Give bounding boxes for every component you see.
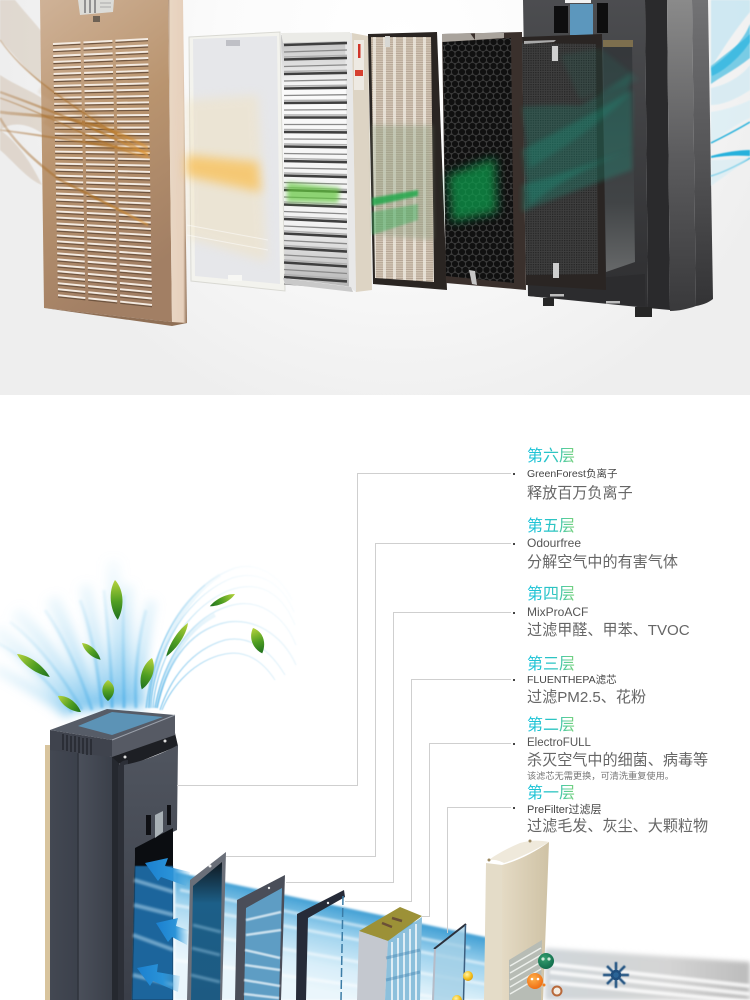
purifier assembled unit [45, 709, 178, 1000]
layer 2 note: 该滤芯无需更换，可清洗重复使用。 [527, 770, 674, 781]
connector: layer 6 [177, 474, 511, 786]
main unit body, open back view [523, 0, 713, 317]
connector: layer 2 [422, 744, 511, 916]
layer 2 description: 杀灭空气中的细菌、病毒等 [527, 751, 708, 769]
layer 5 heading: 第五层 [527, 517, 575, 535]
connector: layer 4 [286, 612, 511, 882]
layer 2 heading: 第二层 [527, 716, 575, 734]
exploded HEPA box [357, 907, 422, 1000]
icon: control window on unit [554, 0, 608, 35]
layer 5 label [527, 517, 678, 571]
front gold cover lower [484, 840, 549, 1000]
icon: red direction arrows [354, 40, 364, 90]
layer 4 name: MixProACF [527, 605, 588, 619]
icon: orange germ [527, 973, 546, 989]
lower-section gray air stream [545, 948, 750, 1000]
filter 4: activated carbon honeycomb [442, 32, 526, 290]
decorative waves: cyan airflow at right [711, 0, 750, 186]
layer 1 description: 过滤毛发、灰尘、大颗粒物 [527, 818, 708, 835]
exploded thin filter frame [432, 924, 466, 1000]
filter 5: odour mesh [522, 34, 606, 290]
exploded filter 1 frame [187, 852, 226, 1000]
exploded filter 3 frame [296, 890, 345, 1000]
layer 3 description: 过滤PM2.5、花粉 [527, 689, 646, 706]
layer 3 label [527, 655, 646, 706]
lower-section airflow fan [0, 560, 296, 714]
yellow dust particles [452, 971, 473, 1000]
layer 1 name: PreFilter过滤层 [527, 803, 602, 816]
icon: blue virus [603, 962, 629, 988]
filter 2: silver electrostatic grille [281, 32, 372, 292]
icon: ring particle [552, 986, 562, 996]
decorative waves: brown airflow ribbons at left [0, 0, 45, 185]
decorative waves: brown airflow strands [0, 40, 150, 225]
icon: product label [78, 0, 114, 15]
teal airflow across filter 5 [522, 48, 640, 212]
layer 6 heading: 第六层 [527, 447, 575, 465]
layer 1 label [527, 784, 708, 835]
icon: green germ [538, 953, 554, 969]
layer 3 heading: 第三层 [527, 655, 575, 673]
layer 2 name: ElectroFULL [527, 737, 592, 749]
filter 3: HEPA [368, 32, 447, 290]
connector: layer 3 [345, 680, 511, 902]
layer 6 label [527, 447, 633, 502]
connector lines [177, 474, 511, 933]
front gold panel with grille [40, 0, 187, 326]
leaves [15, 580, 268, 715]
filter 1: white pre-filter [186, 32, 285, 291]
hero background panel [0, 0, 750, 395]
layer 3 name: FLUENTHEPA滤芯 [527, 673, 617, 686]
layer 4 heading: 第四层 [527, 585, 575, 603]
icon: handle slots on unit [146, 805, 171, 838]
layer 1 heading: 第一层 [527, 784, 575, 802]
top cap of unit [50, 709, 175, 757]
layer 5 description: 分解空气中的有害气体 [527, 554, 678, 571]
connector end dots [513, 473, 515, 809]
layer 6 name: GreenForest负离子 [527, 467, 617, 480]
lower-section blue air stream [175, 872, 497, 1000]
layer 5 name: Odourfree [527, 536, 581, 550]
handles below cap [124, 740, 166, 758]
exploded filter 2 frame [235, 875, 285, 1000]
layer 4 label [527, 585, 690, 639]
layer 2 label [527, 716, 708, 781]
germ icons [527, 953, 629, 996]
layer 4 description: 过滤甲醛、甲苯、TVOC [527, 622, 690, 639]
blue airflow arrows [137, 858, 190, 992]
connector: layer 5 [226, 544, 511, 856]
connector: layer 1 [448, 808, 511, 933]
layer 6 description: 释放百万负离子 [527, 485, 633, 502]
